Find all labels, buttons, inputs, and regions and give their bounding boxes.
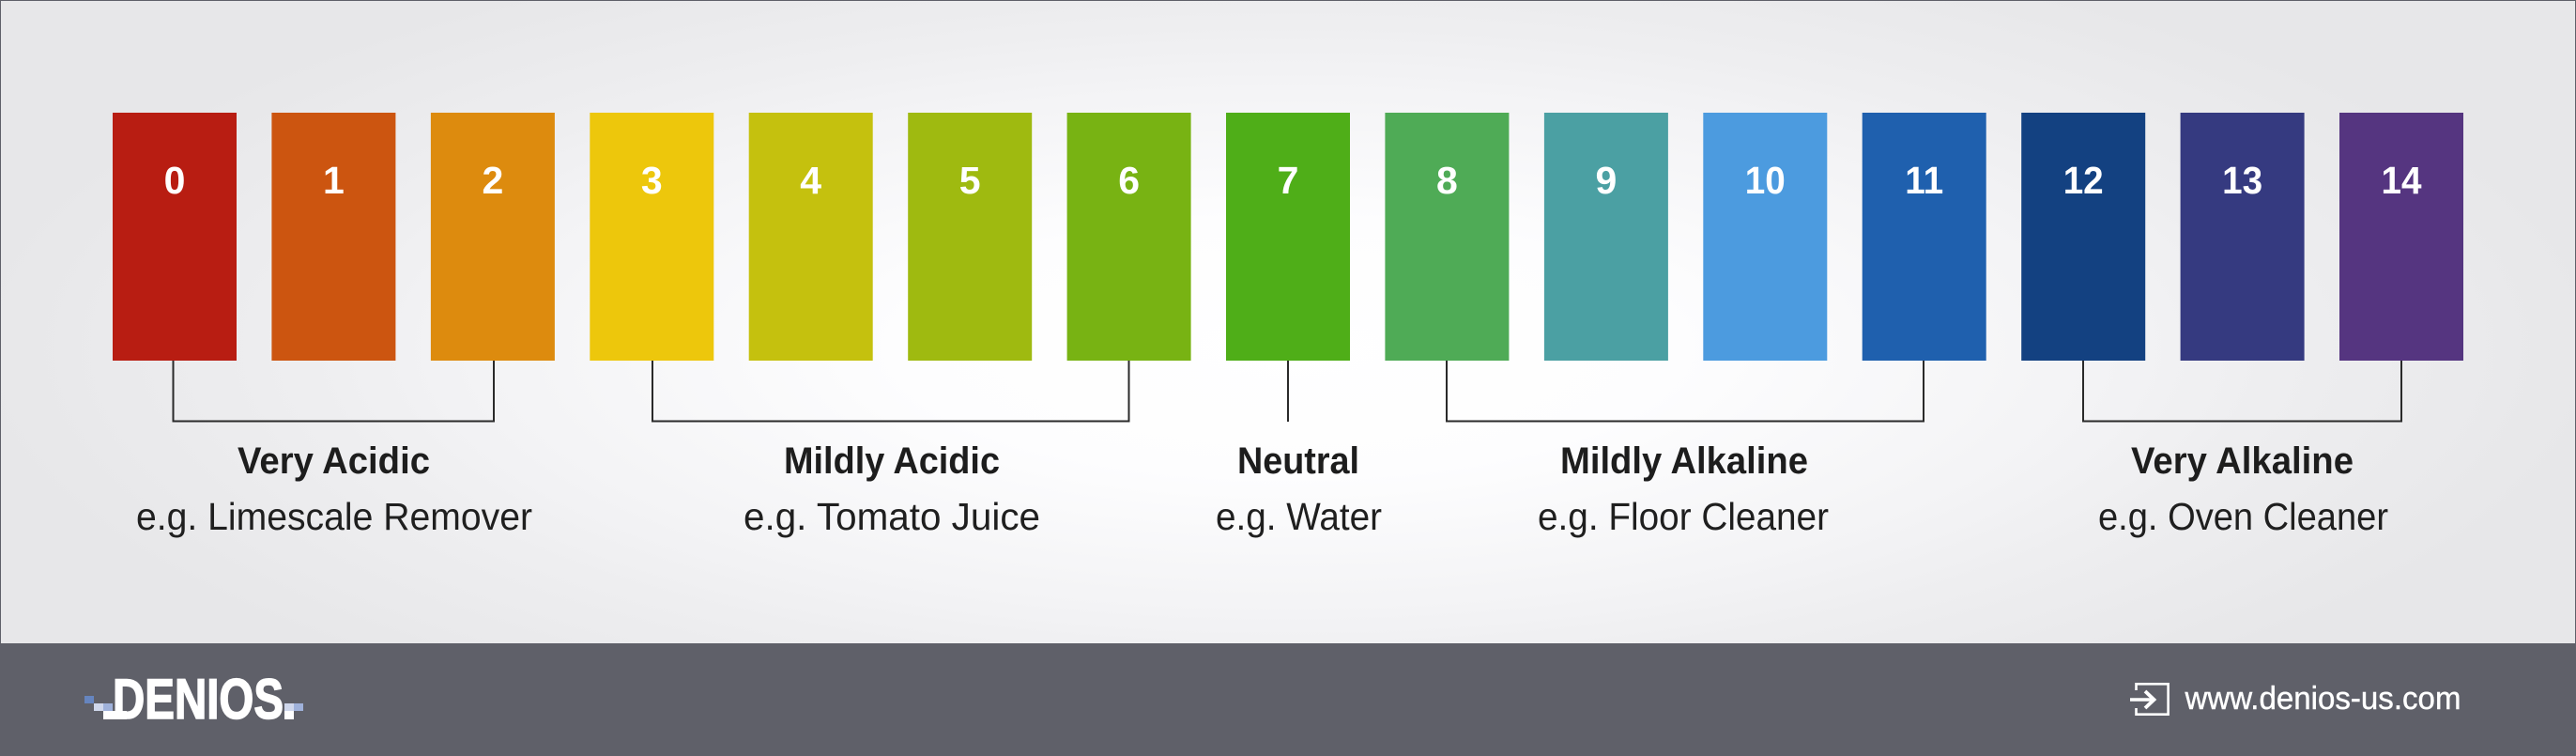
label: mildly acidic: e.g. Tomato Juice: [744, 495, 1040, 538]
pH scale bars: [113, 113, 2463, 361]
label: neutral: [1216, 440, 1382, 538]
label: very alkaline: [2098, 440, 2388, 538]
bar: pH 13: [2181, 113, 2305, 361]
bar: pH 13: 13: [2222, 159, 2262, 202]
bar: pH 12: [2021, 113, 2145, 361]
label: very acidic: [136, 440, 532, 538]
label: mildly alkaline: e.g. Floor Cleaner: [1538, 495, 1829, 538]
bar: pH 6: 6: [1118, 159, 1140, 202]
bar: pH 3: [590, 113, 713, 361]
bar: pH 10: 10: [1745, 159, 1786, 202]
label: very alkaline: Very Alkaline: [2131, 440, 2354, 482]
label: mildly acidic: Mildly Acidic: [784, 440, 1000, 482]
footer url: www.denios-us.com: [2185, 681, 2461, 717]
bar: pH 1: [271, 113, 395, 361]
bar: pH 11: [1863, 113, 1986, 361]
bracket: very alkaline: [2083, 361, 2401, 421]
bar: pH 2: [431, 113, 555, 361]
bar: pH 14: [2339, 113, 2463, 361]
label: very alkaline: e.g. Oven Cleaner: [2098, 495, 2388, 538]
bar: pH 0: 0: [164, 159, 185, 202]
footer logo: DENIOS: DENIOS: [113, 668, 284, 731]
bar: pH 4: 4: [800, 159, 821, 202]
bar: pH 10: [1703, 113, 1827, 361]
bar: pH 6: [1067, 113, 1191, 361]
label: very acidic: Very Acidic: [238, 440, 430, 482]
bar: pH 0: [113, 113, 237, 361]
label: mildly alkaline: [1538, 440, 1829, 538]
label: neutral: e.g. Water: [1216, 495, 1382, 538]
bar: pH 4: [749, 113, 873, 361]
bar: pH 8: [1385, 113, 1509, 361]
bar: pH 5: [908, 113, 1032, 361]
bracket: neutral: [1287, 361, 1289, 422]
bracket: mildly alkaline: [1447, 361, 1924, 421]
bar: pH 5: 5: [959, 159, 981, 202]
icon: link arrow into box: [2130, 684, 2169, 715]
bar: pH 11: 11: [1905, 159, 1943, 202]
bar: pH 14: 14: [2381, 159, 2422, 202]
bar: pH 7: [1226, 113, 1350, 361]
label: very acidic: e.g. Limescale Remover: [136, 495, 532, 538]
bar: pH 2: 2: [482, 159, 503, 202]
bracket: mildly acidic: [652, 361, 1128, 421]
bar: pH 3: 3: [641, 159, 663, 202]
label: mildly acidic: [744, 440, 1040, 538]
bar: pH 7: 7: [1278, 159, 1298, 202]
bar: pH 1: 1: [323, 159, 345, 202]
label: mildly alkaline: Mildly Alkaline: [1560, 440, 1808, 482]
label: neutral: Neutral: [1237, 440, 1359, 482]
bar: pH 12: 12: [2063, 159, 2104, 202]
bar: pH 9: [1544, 113, 1668, 361]
bracket: very acidic: [173, 361, 494, 421]
bar: pH 8: 8: [1436, 159, 1458, 202]
bar: pH 9: 9: [1595, 159, 1617, 202]
